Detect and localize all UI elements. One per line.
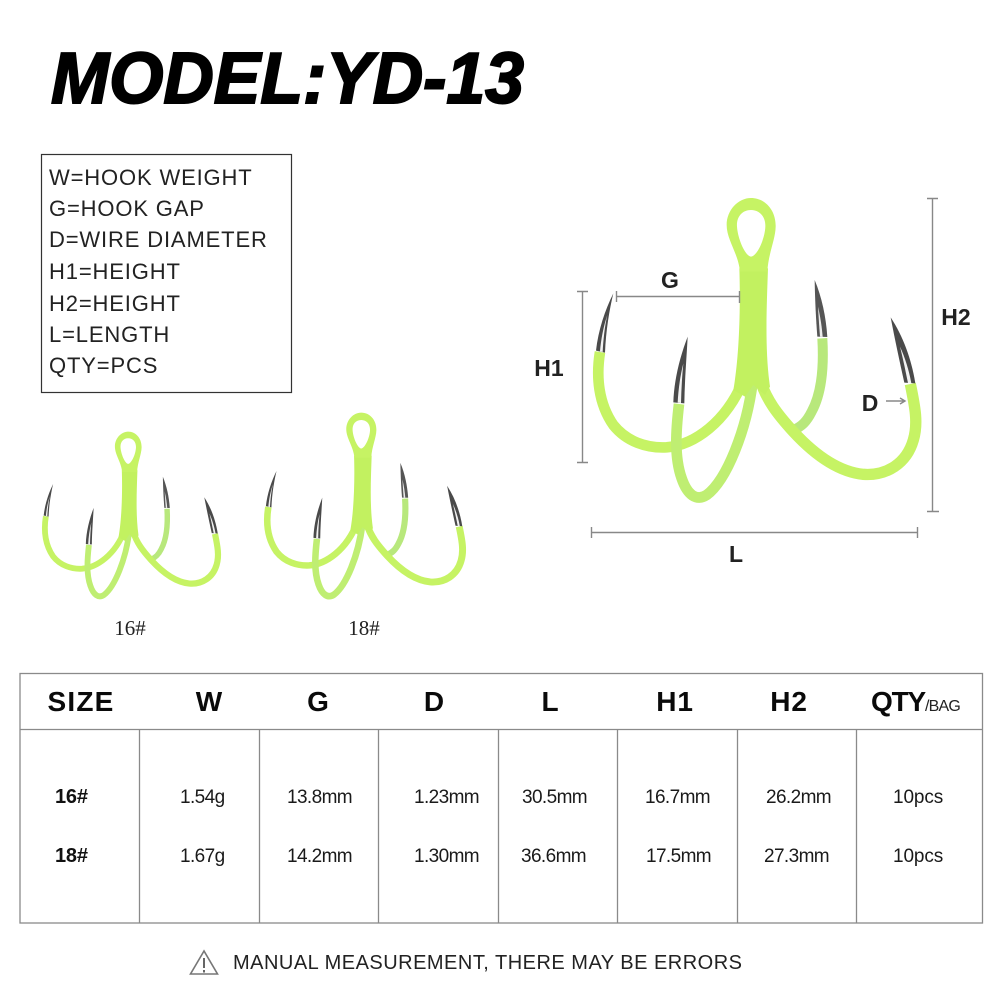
spec table (20, 674, 982, 923)
dimension diagram (534, 198, 971, 567)
row: 16#: 10pcs (893, 787, 943, 808)
row: 18#: 1.30mm (414, 846, 479, 867)
legend: length: L=LENGTH (49, 322, 170, 347)
row: 18#: 36.6mm (521, 846, 586, 867)
row: 16#: 16.7mm (645, 787, 710, 808)
caption: 18#: 18# (348, 616, 380, 640)
dimension: G (616, 267, 740, 303)
icon: 16# hook (44, 432, 218, 596)
row: 18#: 10pcs (893, 846, 943, 867)
caption: 16#: 16# (114, 616, 146, 640)
row: 18#: 18# (55, 845, 88, 867)
disclaimer: MANUAL MEASUREMENT, THERE MAY BE ERRORS (233, 952, 742, 974)
icon: large treble hook (596, 198, 916, 498)
icon: 18# hook (266, 413, 463, 596)
dimension: H2: H2 (941, 304, 971, 330)
table header: H1 (656, 686, 694, 717)
table header: SIZE (47, 686, 115, 717)
row: 18#: 14.2mm (287, 846, 352, 867)
row: 16# (55, 786, 943, 808)
row: 18# (55, 845, 943, 867)
title: MODEL:YD-13 (51, 39, 524, 119)
dimension: G: G (661, 267, 679, 293)
table header: D (424, 686, 444, 717)
row: 16#: 26.2mm (766, 787, 831, 808)
row: 16#: 1.23mm (414, 787, 479, 808)
legend: H1: H1=HEIGHT (49, 259, 181, 284)
table header: L (541, 686, 559, 717)
row: 16#: 30.5mm (522, 787, 587, 808)
row: 18#: 17.5mm (646, 846, 711, 867)
row: 16#: 1.54g (180, 787, 225, 808)
legend: hook gap: G=HOOK GAP (49, 196, 205, 221)
row: 16#: 13.8mm (287, 787, 352, 808)
row: 18#: 27.3mm (764, 846, 829, 867)
legend: hook weight: W=HOOK WEIGHT (49, 165, 253, 190)
legend: H2: H2=HEIGHT (49, 291, 181, 316)
dimension: L (592, 527, 918, 567)
dimension: H1 (534, 291, 588, 462)
dimension: L: L (729, 541, 743, 567)
legend: quantity: QTY=PCS (49, 353, 158, 378)
dimension: D: D (862, 390, 878, 416)
legend box (42, 154, 292, 392)
dimension: D (862, 390, 905, 416)
dimension: H2 (927, 198, 971, 512)
table header: QTY/BAG (871, 686, 960, 717)
row: 18#: 1.67g (180, 846, 225, 867)
icon: warning triangle (190, 951, 218, 974)
row: 16#: 16# (55, 786, 88, 808)
legend: wire diameter: D=WIRE DIAMETER (49, 227, 268, 252)
table header: G (307, 686, 329, 717)
table header (47, 686, 960, 717)
dimension: H1: H1 (534, 355, 564, 381)
table header: H2 (770, 686, 808, 717)
table header: W (196, 686, 223, 717)
